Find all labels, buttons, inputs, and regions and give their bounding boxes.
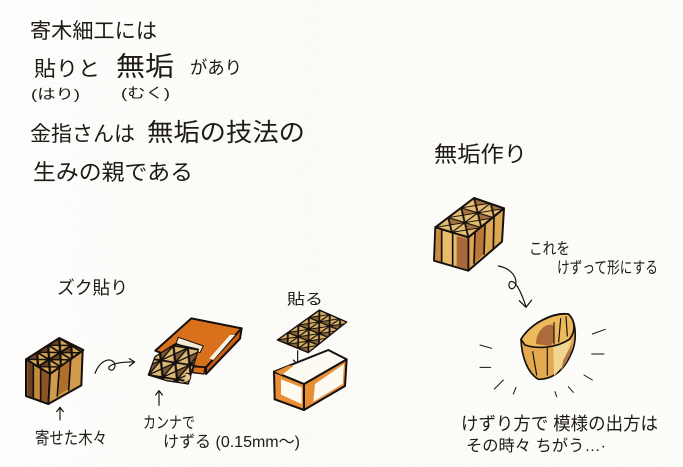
heading line: 寄木細工には: 寄木細工には [30,20,157,43]
caption: カンナで: カンナで [143,415,195,432]
caption: 寄せた木々: 寄せた木々 [35,429,107,448]
arrow: shave down [498,266,532,307]
icon: shine lines [480,329,605,397]
illustration group: ズク貼り steps [26,310,347,420]
line: 無垢の技法の: 無垢の技法の [147,119,305,147]
reading: むく: (むく) [121,85,170,101]
caption: これを: これを [529,240,570,258]
icon: kanna plane with shaving [148,318,242,384]
caption: けずって形にする: けずって形にする [557,259,658,277]
icon: finished carved bowl [521,314,575,379]
line: 金指さんは: 金指さんは [30,123,135,146]
arrow: to block [57,407,63,420]
line: 貼りと: 貼りと [34,58,100,81]
line: 生みの親である: 生みの親である [33,160,193,185]
illustration group: 無垢作り [434,198,605,397]
term: 無垢: 無垢 [116,52,174,82]
heading: ズク貼り: ズク貼り [57,278,128,298]
arrow: paste down [293,351,302,365]
caption: けずり方で模様の出方は: けずり方で 模様の出方は [461,414,658,434]
arrow: to plane [95,359,135,373]
icon: veneer sheet [277,310,347,353]
icon: solid marquetry block [434,198,504,271]
intro text block [30,20,305,185]
icon: base box [274,350,347,410]
arrow: to plane shaving [156,391,162,405]
reading: はり: (はり) [31,86,80,102]
caption: その時々ちがう……: その時々 ちがう…· [466,437,606,455]
heading: 無垢作り: 無垢作り [434,142,527,167]
line: があり: があり [190,58,242,78]
caption: 貼る: 貼る [287,291,323,308]
caption: けずる (0.15mm〜): けずる (0.15mm〜) [163,433,300,451]
icon: stacked wood block [26,338,83,404]
